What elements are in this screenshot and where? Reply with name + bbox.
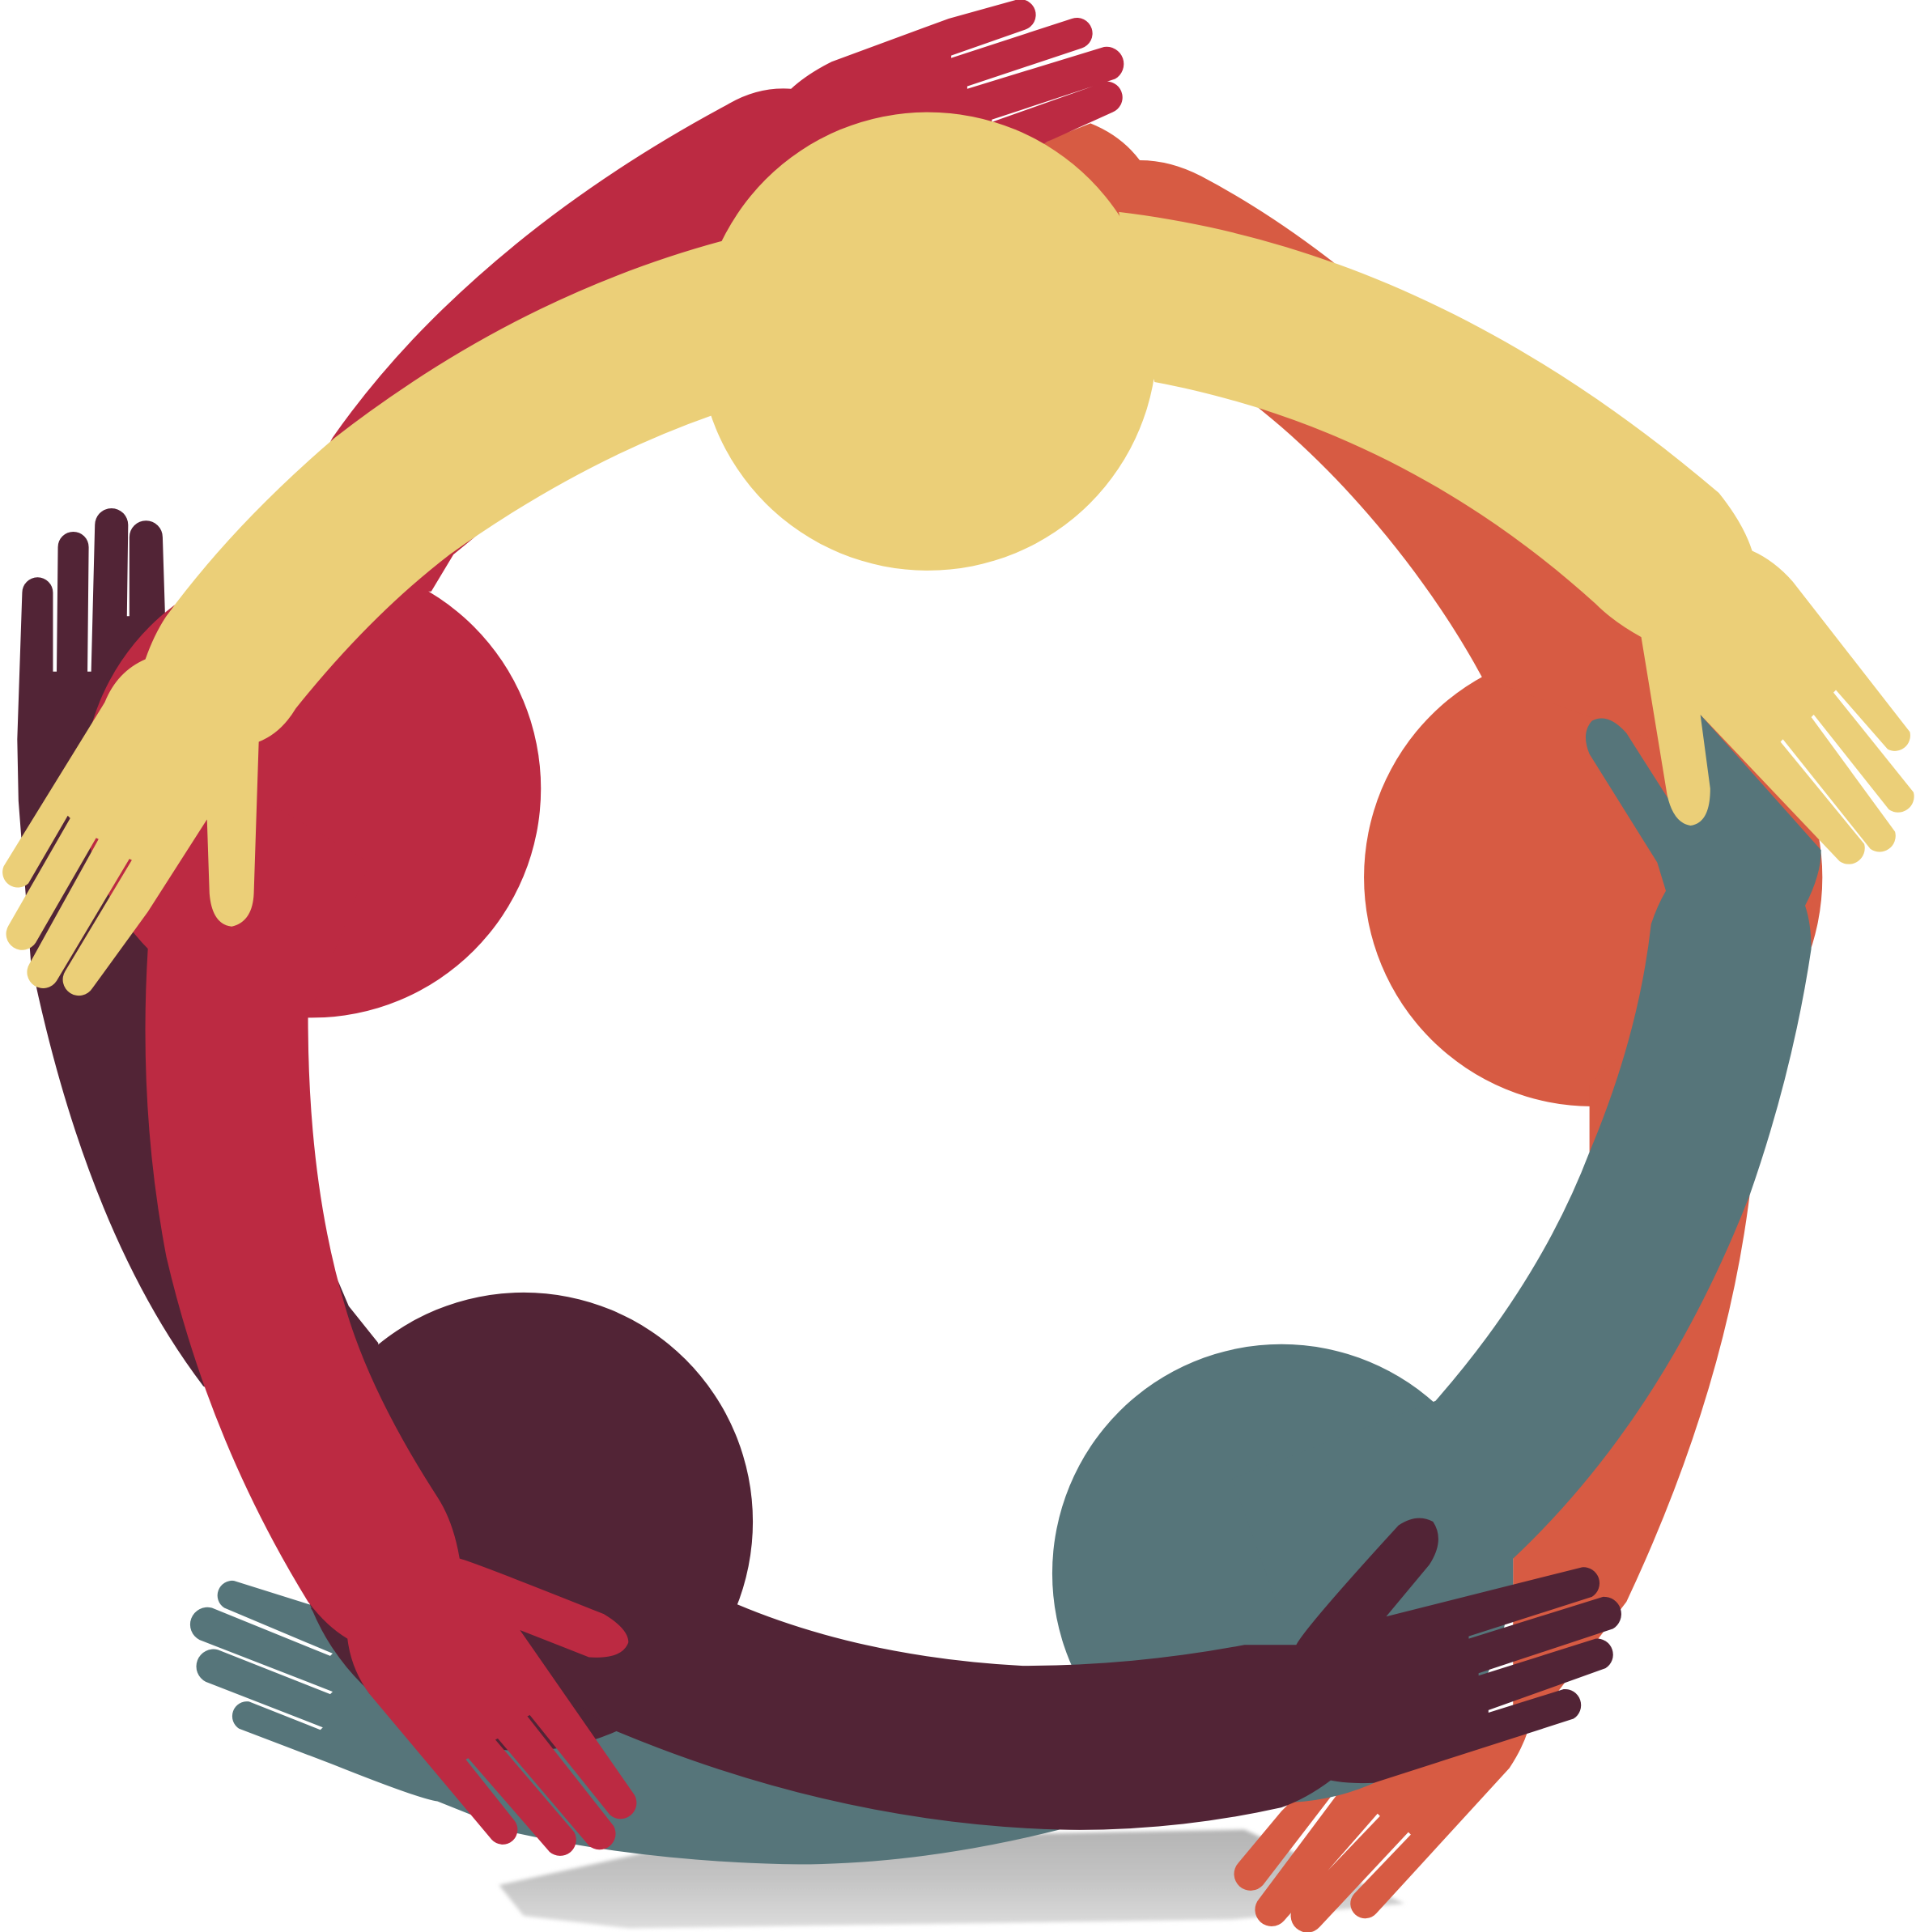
orange arm and hand: lower [1234, 863, 1821, 1932]
plum wedge at crimson wrist [311, 1608, 370, 1694]
figure: teal [190, 715, 1821, 1864]
orange arm: upper [961, 123, 1725, 739]
crimson arm and hand: lower [146, 739, 636, 1856]
teal arm: right [1232, 715, 1821, 1774]
plum arm and hand: right [554, 1518, 1621, 1830]
ground shadow [499, 1830, 1404, 1928]
figure: plum [17, 508, 1621, 1830]
yellow arm and hand: right [1119, 212, 1914, 864]
teal arm and hand: left [190, 1581, 1072, 1864]
plum arm and raised hand [17, 508, 378, 1479]
figure: yellow [2, 113, 1914, 996]
figure: crimson [83, 0, 1124, 1856]
yellow arm and hand: left [2, 240, 724, 996]
crimson arm and hand: top [246, 0, 1124, 592]
figure: orange [961, 123, 1822, 1932]
